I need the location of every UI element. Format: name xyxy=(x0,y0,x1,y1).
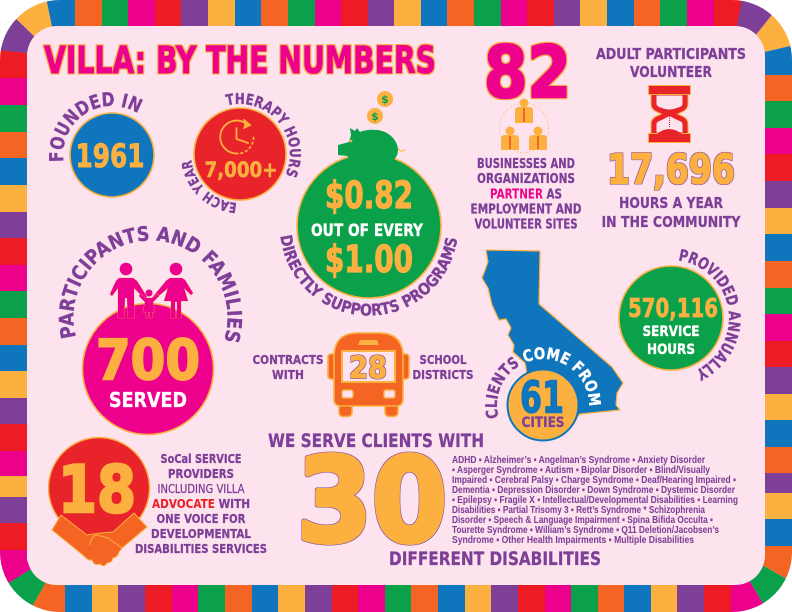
icon: family xyxy=(110,263,193,318)
icon: coins: $ xyxy=(371,110,379,123)
stat: adult participants volunteer: ADULT PARTICIPANTS xyxy=(596,45,746,63)
stat: 30 different disabilities xyxy=(268,430,738,570)
list of disabilities: Dementia ▪ Depression Disorder ▪ Down Syndrome ▪ Dystemic Disorder xyxy=(452,485,735,496)
stat: 30 different disabilities: 30 xyxy=(297,434,447,569)
stat: 30 different disabilities: DIFFERENT DISABILITIES xyxy=(389,548,601,570)
provider text: INCLUDING VILLA xyxy=(158,481,245,496)
provider text: SoCal SERVICE xyxy=(160,451,242,466)
list of disabilities: ADHD ▪ Alzheimer’s ▪ Angelman’s Syndrome ▪ Anxiety Disorder xyxy=(452,455,705,466)
list of disabilities: Impaired ▪ Cerebral Palsy ▪ Charge Syndrome ▪ Deaf/Hearing Impaired ▪ xyxy=(452,475,736,486)
stat: 82 partners xyxy=(470,31,582,232)
stat: contracts with 28 school districts: SCHOOL xyxy=(420,352,467,367)
partner text: BUSINESSES AND xyxy=(477,157,575,172)
icon: network of people xyxy=(499,98,549,153)
stat: adult participants volunteer: 17,696 xyxy=(607,146,735,194)
stat: clients come from 61 cities: COME FROM xyxy=(523,347,602,406)
stat: therapy hours: THERAPY HOURS xyxy=(224,92,302,178)
provider text: ADVOCATE WITH xyxy=(152,496,250,511)
stat: therapy hours xyxy=(182,92,302,214)
stat: clients come from 61 cities xyxy=(481,249,624,442)
stat: contracts with 28 school districts: CONTRACTS xyxy=(252,352,324,367)
partner text: EMPLOYMENT AND xyxy=(470,202,582,218)
stat: 570,116 service hours: 570,116 xyxy=(628,294,718,324)
list of disabilities xyxy=(452,455,738,546)
icon: piggy bank xyxy=(338,128,405,172)
list of disabilities: Tourette Syndrome ▪ William’s Syndrome ▪ Q11 Deletion/Jacobsen’s xyxy=(452,525,719,536)
list of disabilities: ▪ Asperger Syndrome ▪ Autism ▪ Bipolar Disorder ▪ Blind/Visually xyxy=(452,465,710,476)
stat: adult participants volunteer: IN THE COMMUNITY xyxy=(602,213,741,231)
stat: contracts with 28 school districts: 28 xyxy=(349,351,387,386)
stat: 18 SoCal providers: 18 xyxy=(58,453,136,528)
stat: therapy hours: 7,000+ xyxy=(204,158,278,182)
partner text: PARTNER AS xyxy=(490,188,562,202)
list of disabilities: Disorder ▪ Speech & Language Impairment ▪ Spina Bifida Occulta ▪ xyxy=(452,515,713,526)
stat: adult participants volunteer xyxy=(596,45,746,231)
icon: coins: $ xyxy=(381,93,389,106)
stat: $0.82 out of every $1.00: $1.00 xyxy=(325,238,413,281)
stat: founded in 1961: FOUNDED IN xyxy=(48,92,143,161)
provider text xyxy=(135,451,267,556)
provider text: ONE VOICE FOR xyxy=(156,511,246,526)
stat: contracts with 28 school districts: WITH xyxy=(272,367,304,382)
partner text xyxy=(470,157,582,232)
icon: hourglass xyxy=(648,86,690,142)
stat: clients come from 61 cities: 61 xyxy=(520,372,564,424)
list of disabilities: ▪ Epilepsy ▪ Fragile X ▪ Intellectual/Developmental Disabilities ▪ Learning xyxy=(452,495,738,506)
map: California xyxy=(482,250,623,425)
partner text: VOLUNTEER SITES xyxy=(474,218,578,232)
title: VILLA: BY THE NUMBERS xyxy=(44,39,436,82)
partner text: ORGANIZATIONS xyxy=(477,172,575,187)
list of disabilities: Syndrome ▪ Other Health Impairments ▪ Multiple Disabilities xyxy=(452,535,694,546)
stat: 570,116 service hours xyxy=(618,248,741,382)
icon: school bus xyxy=(328,333,409,416)
stat: $0.82 out of every $1.00: DIRECTLY SUPPORTS PROGRAMS xyxy=(280,235,457,316)
icon: handshake xyxy=(52,513,147,566)
stat: 18 SoCal providers xyxy=(48,438,267,566)
stat: 30 different disabilities: WE SERVE CLIENTS WITH xyxy=(268,430,484,452)
stat: $0.82 out of every $1.00 xyxy=(280,91,457,316)
stat: clients come from 61 cities: CLIENTS xyxy=(485,356,518,418)
stat: 700 participants and families: PARTICIPANTS AND FAMILIES xyxy=(58,226,242,342)
stat: 570,116 service hours: PROVIDED ANNUALLY xyxy=(679,248,741,382)
stat: adult participants volunteer: VOLUNTEER xyxy=(630,63,712,81)
stat: founded in 1961 xyxy=(48,92,155,198)
provider text: DEVELOPMENTAL xyxy=(151,526,251,541)
provider text: PROVIDERS xyxy=(168,466,234,481)
stat: 82 partners: 82 xyxy=(484,31,571,114)
stat: contracts with 28 school districts xyxy=(252,333,474,416)
stat: 700 participants and families: SERVED xyxy=(109,388,187,412)
icon: coins xyxy=(367,91,393,124)
stat: founded in 1961: 1961 xyxy=(76,137,144,175)
stat: $0.82 out of every $1.00: OUT OF EVERY xyxy=(311,221,424,240)
stat: adult participants volunteer: HOURS A YEAR xyxy=(619,194,723,212)
stat: contracts with 28 school districts: DISTRICTS xyxy=(412,367,474,382)
list of disabilities: Disabilities ▪ Partial Trisomy 3 ▪ Rett’s Syndrome * Schizophrenia xyxy=(452,505,705,516)
stat: 570,116 service hours: HOURS xyxy=(647,342,695,358)
stat: clients come from 61 cities: CITIES xyxy=(522,415,564,431)
stat: 570,116 service hours: SERVICE xyxy=(642,324,700,340)
icon: clock xyxy=(220,120,254,154)
provider text: DISABILITIES SERVICES xyxy=(135,541,267,556)
stat: $0.82 out of every $1.00: $0.82 xyxy=(325,174,413,217)
stat: therapy hours: EACH YEAR xyxy=(182,160,236,214)
stat: 700 participants and families xyxy=(58,226,242,436)
stat: 700 participants and families: 700 xyxy=(96,328,200,392)
